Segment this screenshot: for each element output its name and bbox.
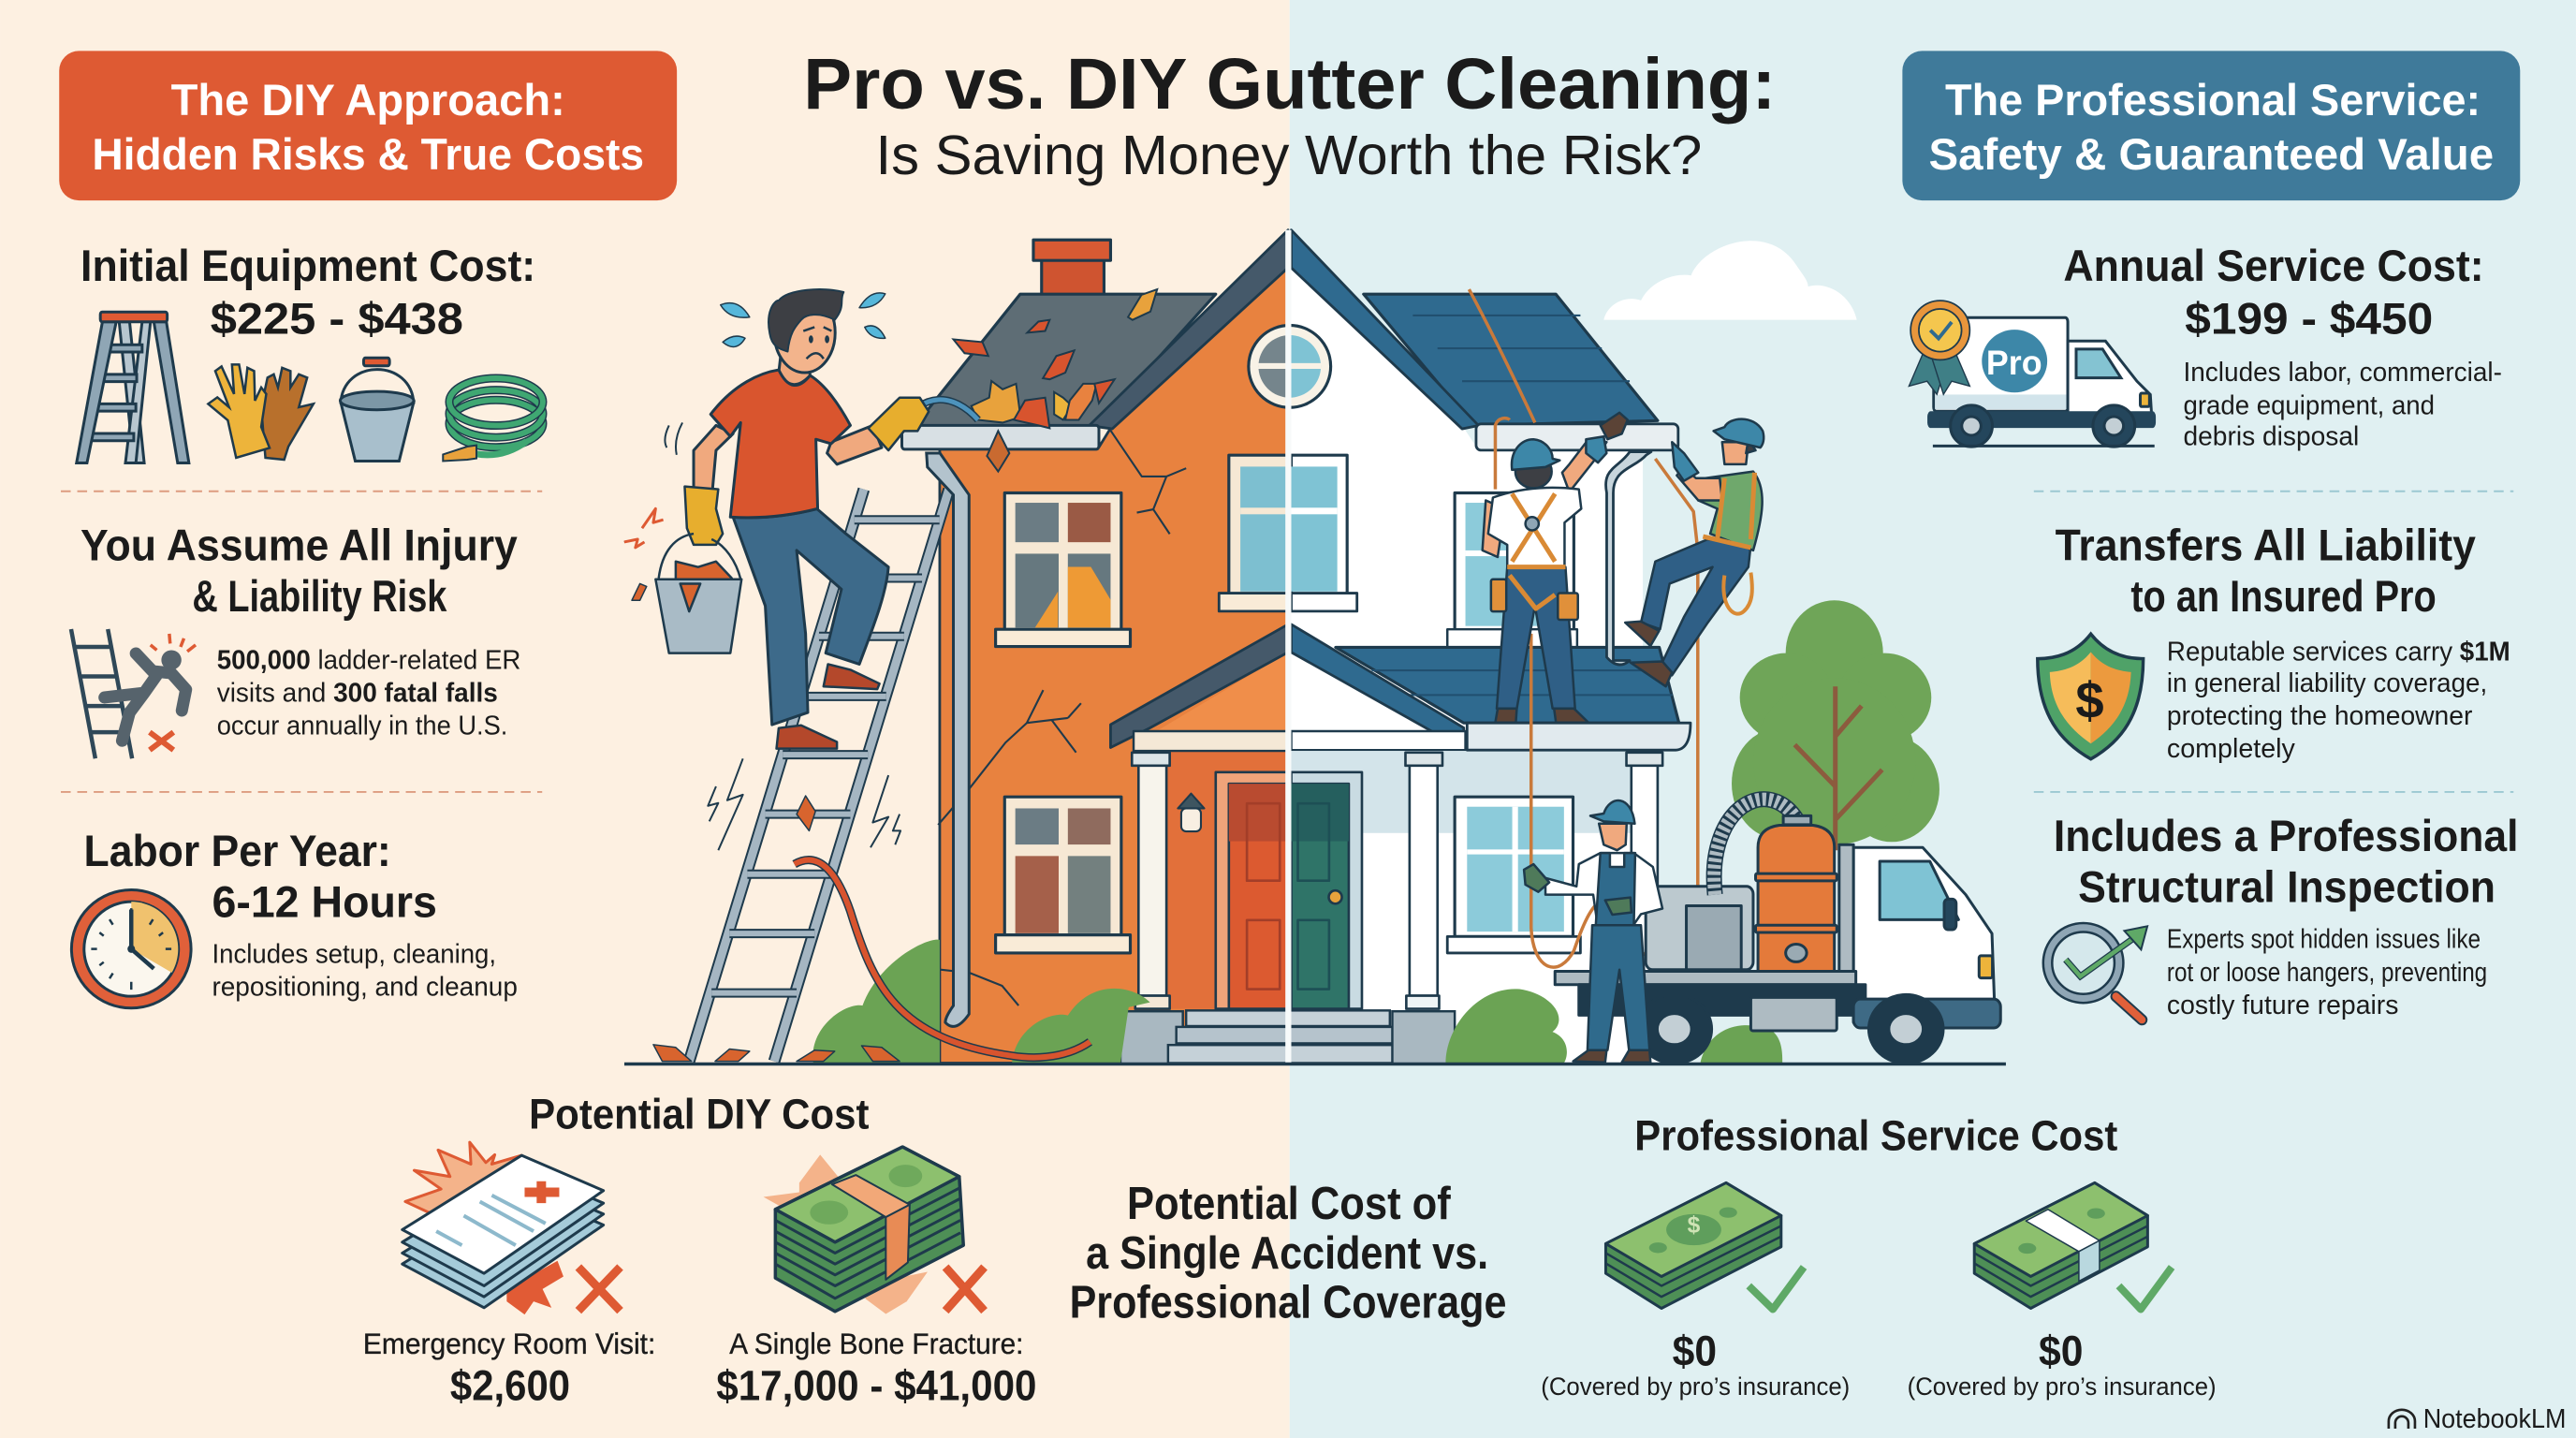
gutter <box>901 425 1099 449</box>
panel: professional heading badge <box>1902 51 2520 200</box>
door right half <box>1292 772 1362 1009</box>
text: central comparison label: Potential Cost of <box>1127 1179 1451 1229</box>
jeans <box>733 508 888 725</box>
head and hat <box>1515 455 1552 488</box>
text: labor description: repositioning, and cleanup <box>212 973 518 1003</box>
text: bone fracture cost <box>716 1327 1036 1409</box>
porch wall shading <box>1292 751 1660 833</box>
text: central comparison label: Professional Coverage <box>1070 1278 1506 1328</box>
porch left <box>1110 624 1288 1009</box>
center window right half <box>1292 455 1357 611</box>
panel: initial equipment cost <box>77 242 543 463</box>
icon: bucket <box>340 358 414 461</box>
front steps <box>1120 1010 1455 1064</box>
corrugated duct <box>1714 800 1798 895</box>
arms <box>1483 439 1606 557</box>
panel: professional service cost <box>1541 1112 2217 1401</box>
text: emergency room cost <box>363 1327 655 1409</box>
logo: NotebookLM: NotebookLM <box>2423 1404 2566 1434</box>
roof: blue shingles <box>1364 294 1658 426</box>
illustration: stressed DIY homeowner <box>624 289 978 1062</box>
illustration: vacuum truck <box>1555 800 2000 1064</box>
text: insurance coverage: Reputable services carry $1M <box>2167 638 2510 668</box>
sweat drops <box>721 293 886 346</box>
figure: service price range: $199 - $450 <box>2185 294 2433 344</box>
figure: equipment cost range: $225 - $438 <box>211 294 463 344</box>
roof fascia <box>1292 230 1479 429</box>
text: service inclusions <box>2183 358 2502 452</box>
icon: service van: Pro <box>1986 344 2042 382</box>
heading: professional service cost: Professional Service Cost <box>1634 1112 2117 1160</box>
lower right window <box>1447 797 1580 953</box>
heading: injury risk: You Assume All Injury <box>80 521 518 570</box>
heading: liability: Transfers All Liability <box>2056 521 2476 570</box>
panel: annual service cost <box>1909 242 2502 452</box>
lower gutter <box>1467 723 1690 750</box>
wall: orange brick <box>940 266 1288 1064</box>
text: emergency room cost: Emergency Room Visit: <box>363 1327 655 1360</box>
heading: liability <box>2056 521 2476 622</box>
text: service inclusions: Includes labor, commercial- <box>2183 358 2502 388</box>
text: insurance coverage <box>2167 638 2510 764</box>
left arm <box>694 425 733 491</box>
text: bone fracture cost: $17,000 - $41,000 <box>716 1361 1036 1409</box>
strain marks <box>624 422 900 850</box>
illustration: worker on ground <box>1524 800 1662 1063</box>
truck chassis <box>1555 972 1856 985</box>
text: second zero cost <box>1908 1327 2217 1401</box>
text: labor description <box>212 939 518 1003</box>
panel: transfers liability <box>2038 521 2510 764</box>
worker on rope <box>1625 419 1764 686</box>
text: ladder injury statistics: 500,000 ladder-related ER <box>217 645 520 675</box>
text: inspection description: Experts spot hidden issues like <box>2167 925 2481 955</box>
panel: DIY heading badge: Hidden Risks & True Costs <box>92 130 644 180</box>
center window left half <box>1219 455 1288 611</box>
text: emergency room cost: $2,600 <box>450 1361 570 1409</box>
illustration: professional side house <box>1249 230 1690 1064</box>
icon: banded cash stack with check <box>1974 1182 2172 1309</box>
bucket of leaves <box>655 534 741 653</box>
text: labor description: Includes setup, cleaning, <box>212 939 496 969</box>
text: dollar sign on cash: $ <box>1688 1212 1701 1238</box>
text: central comparison label: a Single Accident vs. <box>1086 1228 1488 1279</box>
lower left window <box>996 797 1131 953</box>
text: insurance coverage: completely <box>2167 734 2295 764</box>
illustration: DIY gutter, downspout and hose <box>795 289 1157 1058</box>
harness <box>1507 493 1565 609</box>
worker on porch roof <box>1483 413 1628 723</box>
illustration: tree <box>1732 600 1939 850</box>
text: second zero cost: $0 <box>2039 1327 2083 1374</box>
neck and face <box>768 289 843 385</box>
text: first zero cost: (Covered by pro’s insurance) <box>1541 1372 1850 1401</box>
orange tank <box>1758 825 1835 973</box>
text: inspection description: costly future repairs <box>2167 990 2398 1020</box>
panel: DIY heading badge: The DIY Approach: <box>171 76 565 125</box>
lantern <box>1178 794 1204 831</box>
text: second zero cost: (Covered by pro’s insurance) <box>1908 1372 2217 1401</box>
icon: service van <box>1909 301 2156 447</box>
text: ladder injury statistics: visits and 300 fatal falls <box>217 678 498 708</box>
door left half <box>1216 772 1288 1009</box>
cab <box>1853 847 1995 1022</box>
shirt <box>710 370 850 518</box>
illustration: professional rope and workers <box>1469 289 1764 967</box>
heading: inspection: Includes a Professional <box>2054 812 2519 861</box>
wall cracks <box>938 431 1186 1005</box>
safety ropes <box>1469 289 1698 967</box>
upper gutter and downspout <box>1476 424 1678 665</box>
porch roof <box>1292 624 1679 750</box>
porch columns <box>1405 753 1662 1009</box>
text: first zero cost <box>1541 1327 1850 1401</box>
panel: professional heading badge: Safety & Guaranteed Value <box>1928 130 2494 180</box>
heading: inspection: Structural Inspection <box>2078 863 2496 913</box>
icon: garden hose <box>443 378 543 461</box>
panel: DIY heading badge <box>59 51 677 200</box>
wheels <box>1637 994 1712 1064</box>
upper left window with reflection <box>996 493 1131 647</box>
text: service inclusions: grade equipment, and <box>2183 390 2435 420</box>
grey equipment <box>1646 887 1753 970</box>
heading: potential DIY cost: Potential DIY Cost <box>529 1091 869 1138</box>
round window <box>1249 325 1331 407</box>
upper right window <box>1447 493 1577 647</box>
pants and boots <box>1497 567 1575 709</box>
panel: professional heading badge: The Professional Service: <box>1945 76 2481 125</box>
heading: equipment cost: Initial Equipment Cost: <box>80 242 535 291</box>
panel: injury and liability risk <box>71 521 520 758</box>
icon: shield with dollar <box>2038 634 2144 759</box>
heading: service cost: Annual Service Cost: <box>2063 242 2484 291</box>
heading: liability: to an Insured Pro <box>2130 572 2437 622</box>
figure: hours: 6-12 Hours <box>212 877 437 927</box>
roof: grey shingles <box>915 294 1216 426</box>
text: ladder injury statistics <box>217 645 520 741</box>
icon: person falling from ladder <box>71 629 196 758</box>
text: central comparison label <box>1070 1179 1506 1328</box>
text: ladder injury statistics: occur annually in the U.S. <box>217 711 507 741</box>
icon: flat cash stack with check <box>1605 1182 1804 1309</box>
tool pouches <box>1491 580 1506 611</box>
gutter leaves <box>954 289 1157 472</box>
text: first zero cost: $0 <box>1673 1327 1717 1374</box>
text: inspection description <box>2167 925 2487 1020</box>
text: bone fracture cost: A Single Bone Fracture: <box>729 1327 1023 1360</box>
falling and ground leaves <box>632 583 900 1062</box>
wall: white siding <box>1292 268 1660 1064</box>
panel: labor per year <box>71 827 518 1008</box>
icon: medical bills with burst and X <box>402 1142 621 1314</box>
title: Pro vs. DIY Gutter Cleaning: <box>803 44 1776 125</box>
chimney <box>1033 240 1110 296</box>
downspout <box>927 453 969 1026</box>
icon: shield with dollar: $ <box>2075 672 2104 729</box>
illustration: DIY side house <box>915 230 1288 1064</box>
title: Is Saving Money Worth the Risk? <box>875 124 1702 186</box>
bushes <box>812 940 1782 1064</box>
heading: injury risk <box>80 521 518 622</box>
ground line <box>624 1064 2006 1065</box>
gloves <box>684 398 929 545</box>
roof fascia <box>1090 230 1288 429</box>
torso <box>1488 488 1581 567</box>
porch column <box>1132 753 1170 1009</box>
icon: clock <box>71 890 191 1008</box>
panel: potential DIY cost <box>363 1091 1036 1409</box>
blue nozzle hose <box>901 400 978 425</box>
red garden hose <box>795 860 1090 1058</box>
icon: ladder <box>77 312 189 463</box>
icon: magnifier with check <box>2048 926 2147 1020</box>
heading: inspection <box>2054 812 2519 913</box>
text: insurance coverage: in general liability coverage, <box>2167 668 2487 698</box>
text: insurance coverage: protecting the homeowner <box>2167 701 2473 731</box>
heading: labor: Labor Per Year: <box>84 827 391 876</box>
illustration: DIY ladder <box>689 490 949 1062</box>
title <box>803 44 1776 186</box>
text: service inclusions: debris disposal <box>2183 422 2359 452</box>
panel: structural inspection <box>2048 812 2519 1020</box>
icon: cloud <box>1603 241 1857 320</box>
heading: injury risk: & Liability Risk <box>192 572 447 622</box>
shoes <box>777 664 880 749</box>
right arm <box>827 425 882 464</box>
icon: work gloves <box>208 364 314 460</box>
text: inspection description: rot or loose hangers, preventing <box>2167 958 2487 988</box>
icon: money stack with burst and X <box>764 1147 985 1313</box>
